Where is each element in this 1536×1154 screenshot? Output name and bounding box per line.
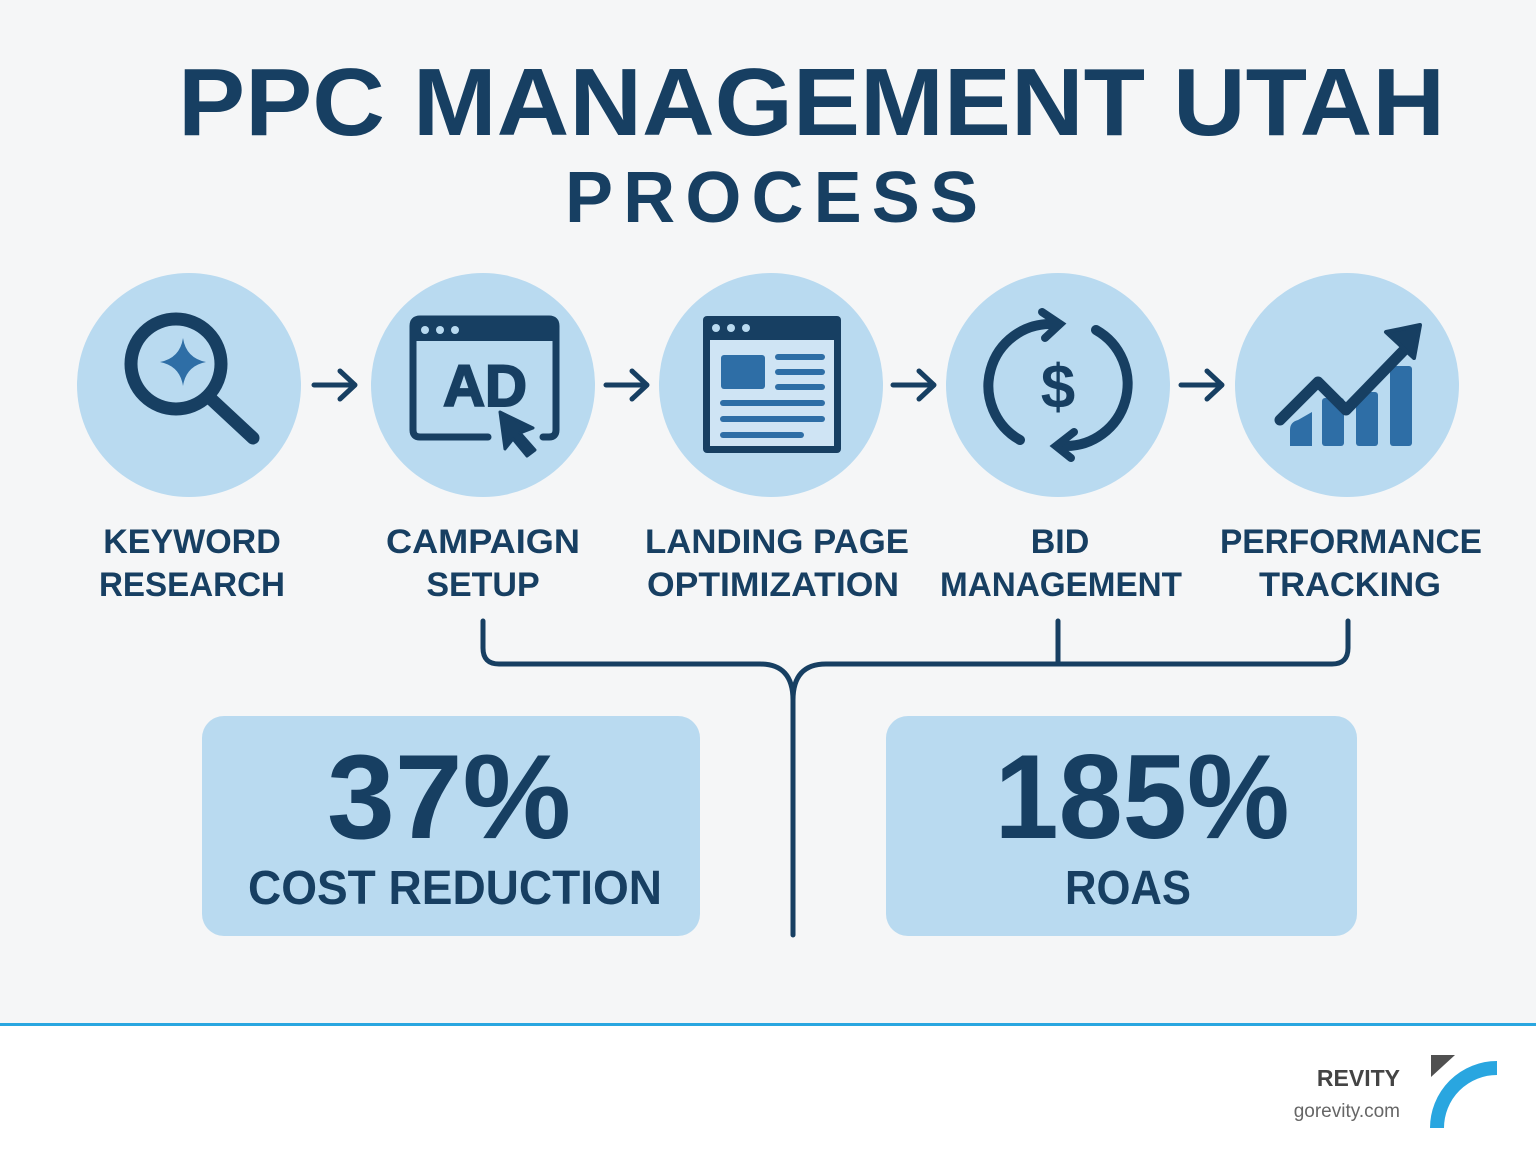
step 4: bid management	[940, 273, 1182, 604]
arrow 4	[1181, 371, 1222, 399]
step 3: landing page optimization: LANDING PAGE	[645, 523, 909, 561]
icon: web page	[703, 316, 841, 453]
step 1: keyword research: RESEARCH	[99, 566, 285, 604]
icon: ad window: AD	[443, 354, 527, 419]
step 5: performance tracking	[1220, 273, 1482, 604]
arrow 3	[893, 371, 934, 399]
icon: magnifier	[131, 319, 253, 438]
step 4: bid management: BID	[1031, 523, 1089, 561]
footer brand: gorevity.com	[1294, 1101, 1400, 1122]
stat box: roas	[886, 716, 1357, 936]
footer brand	[1294, 1055, 1497, 1128]
connector lines	[483, 621, 1348, 935]
stat box: cost reduction: COST REDUCTION	[248, 862, 662, 915]
stat box: roas: 185%	[994, 730, 1290, 864]
step 4: bid management: $	[1041, 353, 1075, 422]
step 5: performance tracking: PERFORMANCE	[1220, 523, 1482, 561]
step 1: keyword research: KEYWORD	[103, 523, 281, 561]
step 4: bid management: MANAGEMENT	[940, 566, 1182, 604]
stat box: roas: ROAS	[1065, 862, 1191, 915]
icon: growth chart	[1280, 325, 1420, 446]
subtitle: PROCESS	[565, 158, 978, 238]
footer brand: REVITY	[1317, 1065, 1400, 1091]
step 2: campaign setup	[371, 273, 595, 604]
icon: dollar cycle	[988, 312, 1128, 458]
stat box: cost reduction	[202, 716, 700, 936]
arrow 2	[606, 371, 647, 399]
title: PPC MANAGEMENT UTAH	[178, 49, 1445, 156]
step 1: keyword research	[77, 273, 301, 604]
arrow 1	[314, 371, 355, 399]
step 3: landing page optimization	[645, 273, 909, 604]
step 2: campaign setup: CAMPAIGN	[386, 523, 580, 561]
icon: ad window	[413, 319, 556, 456]
stat box: cost reduction: 37%	[327, 730, 571, 864]
step 5: performance tracking: TRACKING	[1259, 566, 1441, 604]
icon: logo	[1431, 1055, 1455, 1077]
step 3: landing page optimization: OPTIMIZATION	[647, 566, 899, 604]
step 2: campaign setup: SETUP	[426, 566, 540, 604]
